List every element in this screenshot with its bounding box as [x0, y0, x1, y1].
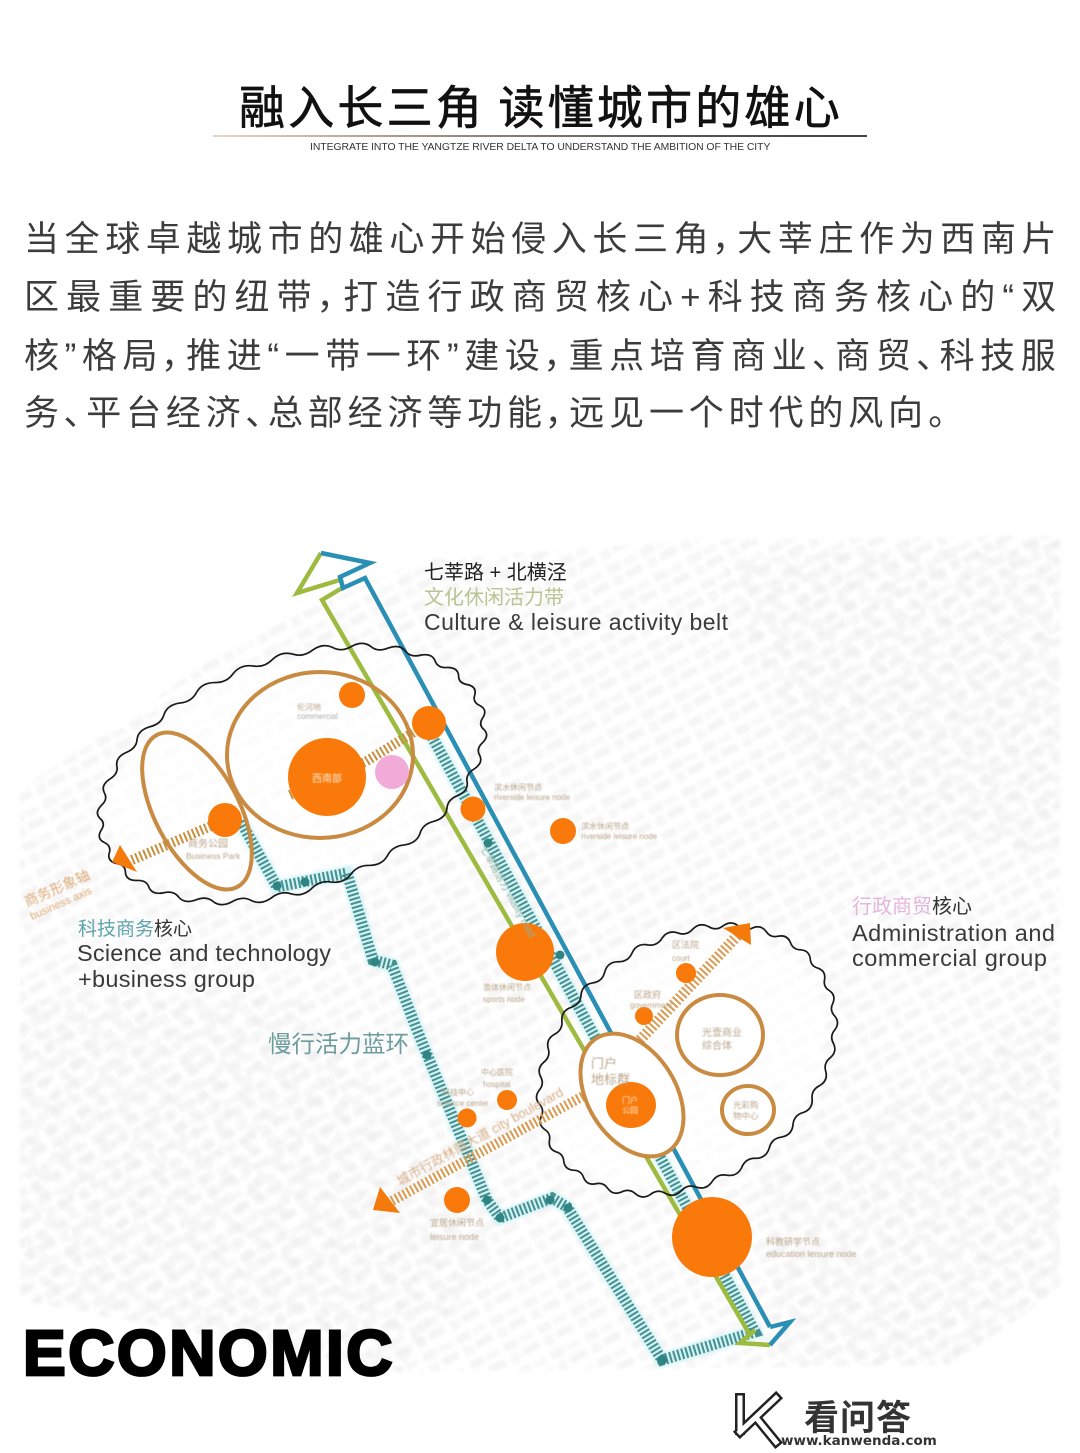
label: administration and commercial core: commercial group: [852, 945, 1047, 971]
small node labels: 公园: [622, 1106, 638, 1115]
label: science and technology core: [77, 918, 331, 992]
watermark logo: [733, 1390, 937, 1449]
small node labels: riverside leisure node: [581, 832, 658, 841]
english subtitle: INTEGRATE INTO THE YANGTZE RIVER DELTA TO UNDERSTAND THE AMBITION OF THE CITY: [310, 142, 770, 153]
small node labels: 科技中心: [442, 1087, 474, 1097]
intro paragraph: 当全球卓越城市的雄心开始侵入长三角，大莘庄作为西南片: [24, 220, 1062, 259]
science and technology core: scalloped boundary: [61, 594, 523, 954]
economic heading: ECONOMIC: [23, 1317, 395, 1389]
small node labels: 商务公园: [188, 837, 228, 850]
small node labels: 科教研学节点: [766, 1236, 820, 1247]
small node labels: 门户: [591, 1056, 617, 1071]
label: business axis: business axis: [28, 885, 94, 923]
small node labels: 物中心: [733, 1111, 759, 1121]
small node labels: riverside leisure node: [494, 793, 571, 802]
small node labels: 门户: [622, 1095, 638, 1105]
small node labels: government: [630, 1001, 673, 1010]
pink node: [375, 755, 409, 789]
faded city block background: [20, 535, 1060, 1372]
small node labels: commercial: [297, 712, 338, 721]
label: culture and leisure belt: [424, 561, 729, 635]
small node labels: leisure node: [430, 1232, 479, 1242]
small node labels: 光壹商业: [702, 1026, 742, 1039]
blue belt line with arrows: [321, 553, 790, 1345]
small node labels: education leisure node: [766, 1249, 857, 1259]
small node labels: 中心医院: [481, 1067, 513, 1077]
small node labels: 区法院: [672, 939, 699, 950]
small node labels: 区政府: [634, 989, 661, 1000]
small node labels: 综合体: [702, 1039, 732, 1052]
small node labels: science center: [437, 1099, 489, 1108]
business axis: [112, 723, 429, 872]
green culture belt line with arrows: [297, 553, 770, 1345]
small node labels: 城市行政林荫大道 city boulevard: [394, 1084, 566, 1189]
small node labels: 光彩购: [733, 1100, 759, 1110]
small node labels: 七莘路活力 vitality road: [477, 843, 539, 940]
label: culture and leisure belt: 七莘路 + 北横泾: [424, 561, 567, 584]
small node labels: 地标群: [591, 1072, 630, 1087]
small node labels: Business Park: [186, 851, 241, 861]
small node labels: 伦河地: [297, 702, 321, 712]
slow vitality blue ring: [240, 733, 755, 1365]
small node labels: court: [672, 954, 691, 963]
small node labels: 西南部: [312, 772, 342, 785]
administration core: scalloped boundary: [484, 866, 890, 1254]
watermark url: www.kanwenda.com: [781, 1433, 937, 1449]
intro paragraph: 务、平台经济、总部经济等功能，远见一个时代的风向。: [24, 394, 950, 433]
small node labels: [186, 702, 857, 1259]
intro paragraph: 核”格局，推进“一带一环”建设，重点培育商业、商贸、科技服: [24, 337, 1061, 376]
watermark name: 看问答: [804, 1390, 912, 1441]
label: slow vitality blue ring: 慢行活力蓝环: [268, 1031, 409, 1057]
label: culture and leisure belt: 文化休闲活力带: [424, 586, 564, 609]
title rule: [213, 135, 867, 136]
business core rings: [120, 672, 413, 907]
city boulevard axis: [373, 923, 751, 1213]
orange nodes: [208, 682, 752, 1277]
small node labels: sports node: [483, 995, 525, 1004]
small node labels: 激体休闲节点: [483, 982, 531, 992]
label: science and technology core: +business group: [78, 966, 255, 992]
intro paragraph: [24, 220, 1063, 433]
label: business axis: 商务形象轴: [22, 867, 92, 910]
label: science and technology core: 科技商务核心: [78, 918, 192, 940]
small node labels: hospital: [483, 1080, 511, 1089]
label: administration and commercial core: [852, 895, 1055, 971]
label: administration and commercial core: 行政商贸核心: [852, 895, 972, 918]
small node labels: 滨水休闲节点: [581, 821, 629, 831]
label: culture and leisure belt: Culture & leisure activity belt: [424, 609, 729, 635]
label: science and technology core: Science and technology: [77, 940, 331, 966]
icon: K mark: [733, 1390, 783, 1449]
small node labels: 滨水休闲节点: [494, 782, 542, 792]
small node labels: 宜居休闲节点: [430, 1217, 484, 1228]
administration core rings: [559, 995, 774, 1175]
title: 融入长三角 读懂城市的雄心: [239, 72, 843, 138]
label: administration and commercial core: Administration and: [852, 920, 1055, 946]
intro paragraph: 区最重要的纽带，打造行政商贸核心+科技商务核心的“双: [24, 278, 1063, 317]
